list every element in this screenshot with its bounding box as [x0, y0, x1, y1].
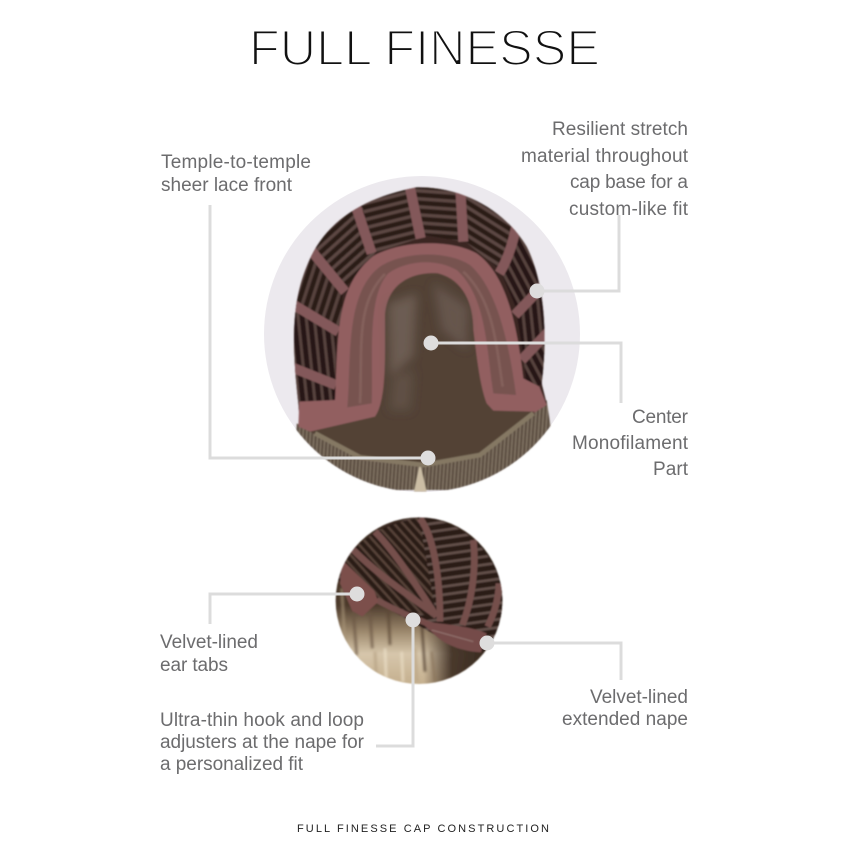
- label: monofilament part: Center: [632, 407, 689, 428]
- label: ear tabs: Velvet-lined: [160, 632, 258, 653]
- label: stretch material: cap base for a: [570, 172, 688, 193]
- label: temple-to-temple lace: Temple-to-temple: [161, 152, 311, 173]
- label: hook and loop adjusters: adjusters at the nape for: [160, 732, 365, 753]
- label: ear tabs: ear tabs: [160, 655, 228, 676]
- label: extended nape: Velvet-lined: [590, 687, 688, 708]
- cap illustration, top view: [287, 177, 560, 492]
- leader: ear tabs: [210, 586, 364, 624]
- leader: stretch material: [530, 215, 619, 298]
- label: hook and loop adjusters: Ultra-thin hook and loop: [160, 710, 364, 731]
- leader: hook and loop adjusters: [376, 612, 420, 746]
- panel: top cap photo circle: [264, 176, 580, 492]
- label: hook and loop adjusters: a personalized fit: [160, 754, 304, 775]
- panel: bottom cap photo circle: [332, 515, 508, 688]
- label: extended nape: extended nape: [562, 709, 688, 730]
- backdrop circle: [264, 176, 580, 492]
- label: stretch material: material throughout: [521, 146, 689, 167]
- label: monofilament part: Part: [653, 459, 689, 480]
- leader: monofilament part: [424, 336, 621, 403]
- label: stretch material: custom-like fit: [569, 199, 689, 220]
- leader: extended nape: [480, 636, 621, 680]
- cap illustration, nape view: [332, 515, 508, 688]
- footer caption: FULL FINESSE CAP CONSTRUCTION: [297, 823, 549, 835]
- leader: temple-to-temple lace: [210, 205, 436, 466]
- label: stretch material: Resilient stretch: [552, 119, 688, 140]
- title: FULL FINESSE: [249, 20, 600, 76]
- label: temple-to-temple lace: sheer lace front: [161, 175, 293, 196]
- label: monofilament part: Monofilament: [572, 433, 689, 454]
